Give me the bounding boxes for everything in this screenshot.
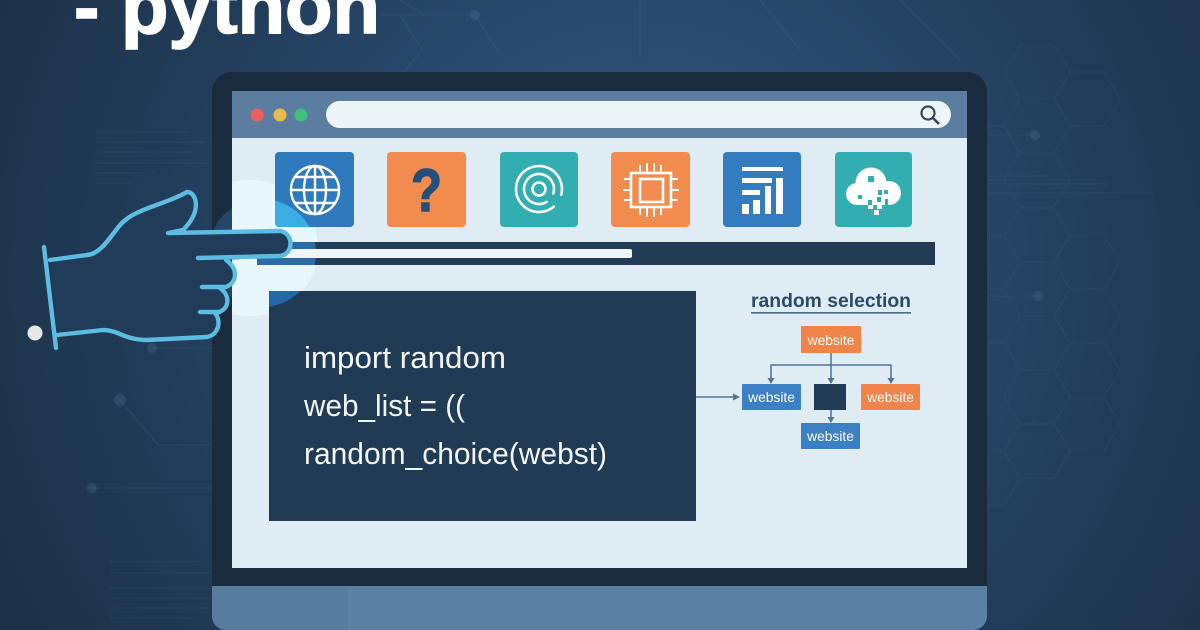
icon: spiral [500,152,578,227]
icon: cloud [835,152,912,227]
website node left [742,384,801,410]
code text: web_list = (( [303,388,466,423]
icon: chip [611,152,690,227]
icon: question mark: ? [411,157,442,224]
screen [232,91,967,568]
window buttons [250,108,308,122]
laptop base [212,580,987,630]
glow on bezel [213,208,232,298]
website node right: website [866,390,914,405]
diagram: random selection [696,291,920,449]
dark node [814,384,846,410]
address bar [326,101,951,128]
website node bottom: website [806,429,854,444]
website node top [801,326,861,353]
glow over globe tile [275,200,310,227]
website node top: website [807,333,855,348]
laptop [212,72,987,630]
website node bottom [801,423,860,449]
website node right [861,384,920,410]
dot [28,326,42,340]
icon: search [922,106,939,124]
icon: question mark [387,152,466,227]
icon: bar chart [723,152,801,227]
code panel [269,291,696,521]
code text: import random [304,340,506,375]
laptop bezel [212,72,987,586]
progress bar [257,242,935,265]
code text [303,340,607,471]
icon: pointing hand [44,192,290,348]
connector arrows [696,353,891,420]
touch glow on screen [232,180,318,316]
icon: globe [275,152,354,227]
browser toolbar [232,91,967,138]
website node left: website [747,390,795,405]
code text: random_choice(webst) [304,436,607,471]
diagram heading: random selection [751,291,911,312]
